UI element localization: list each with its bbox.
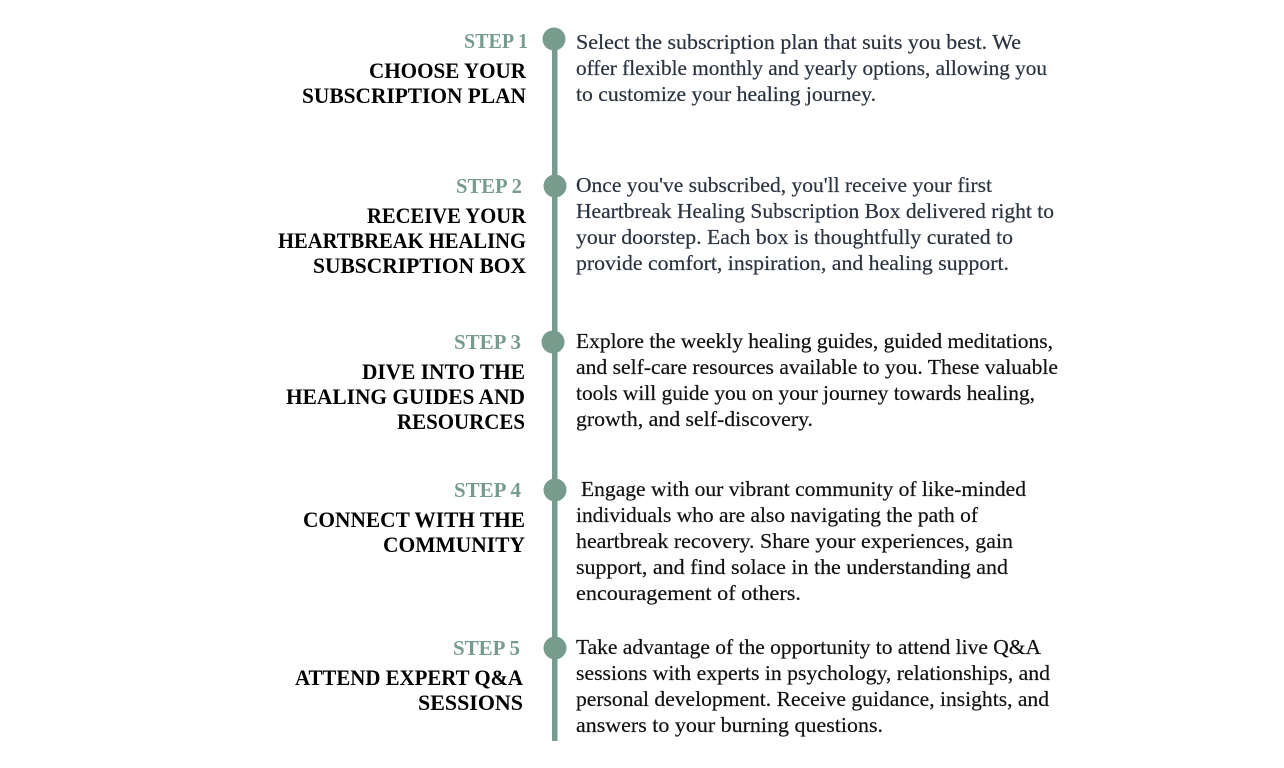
step 4 description: encouragement of others. bbox=[576, 581, 801, 605]
step 3 description: and self-care resources available to you. These valuable bbox=[576, 355, 1058, 379]
step 3 description: Explore the weekly healing guides, guided meditations, bbox=[576, 329, 1053, 353]
step 1 heading: CHOOSE YOUR bbox=[369, 58, 527, 83]
step 2 description: Once you've subscribed, you'll receive your first bbox=[576, 173, 992, 197]
step 3 description: growth, and self-discovery. bbox=[576, 407, 813, 431]
step 3 heading: STEP 3 bbox=[454, 330, 521, 354]
step 3 description bbox=[576, 329, 1058, 431]
step 1 description: to customize your healing journey. bbox=[576, 82, 876, 106]
step 2 description: your doorstep. Each box is thoughtfully curated to bbox=[576, 225, 1013, 249]
step 4 heading bbox=[303, 478, 525, 557]
step 3 heading: RESOURCES bbox=[397, 409, 525, 434]
step 5 description: sessions with experts in psychology, relationships, and bbox=[576, 661, 1051, 685]
step 1 heading: STEP 1 bbox=[464, 29, 528, 53]
step 5 description: Take advantage of the opportunity to attend live Q&A bbox=[576, 635, 1042, 659]
step 1 heading bbox=[302, 29, 528, 108]
step 3 heading: DIVE INTO THE bbox=[362, 359, 525, 384]
step 4 heading: CONNECT WITH THE bbox=[303, 507, 525, 532]
step 5 description: personal development. Receive guidance, insights, and bbox=[576, 687, 1050, 711]
step 5 description: answers to your burning questions. bbox=[576, 713, 883, 737]
step 1 description: Select the subscription plan that suits you best. We bbox=[576, 30, 1021, 54]
timeline: vertical line and step dots bbox=[542, 28, 566, 741]
step 1 description: offer flexible monthly and yearly options, allowing you bbox=[576, 56, 1048, 80]
step 2 description: provide comfort, inspiration, and healing support. bbox=[576, 251, 1009, 275]
step 2 description bbox=[576, 173, 1054, 275]
step 2 heading: SUBSCRIPTION BOX bbox=[313, 253, 526, 278]
step 2 heading: HEARTBREAK HEALING bbox=[278, 228, 526, 253]
step 4 description: support, and find solace in the understanding and bbox=[576, 555, 1009, 579]
step 2 heading: RECEIVE YOUR bbox=[367, 203, 527, 228]
step 4 heading: COMMUNITY bbox=[383, 532, 525, 557]
step 2 description: Heartbreak Healing Subscription Box delivered right to bbox=[576, 199, 1054, 223]
step 5 description bbox=[576, 635, 1051, 737]
step 5 heading: STEP 5 bbox=[453, 636, 520, 660]
step 2 heading bbox=[278, 174, 527, 278]
step 5 heading: ATTEND EXPERT Q&A bbox=[295, 665, 524, 690]
step 2 heading: STEP 2 bbox=[456, 174, 522, 198]
step 4 heading: STEP 4 bbox=[454, 478, 521, 502]
step 4 description: individuals who are also navigating the path of bbox=[576, 503, 978, 527]
step 1 heading: SUBSCRIPTION PLAN bbox=[302, 83, 526, 108]
step 4 description: Engage with our vibrant community of like-minded bbox=[581, 477, 1027, 501]
step 1 description bbox=[576, 30, 1048, 106]
step 4 description: heartbreak recovery. Share your experiences, gain bbox=[576, 529, 1014, 553]
step 5 heading bbox=[295, 636, 524, 715]
step 3 heading bbox=[286, 330, 525, 434]
step 3 heading: HEALING GUIDES AND bbox=[286, 384, 525, 409]
step 4 description bbox=[576, 477, 1027, 605]
step 3 description: tools will guide you on your journey towards healing, bbox=[576, 381, 1035, 405]
step 5 heading: SESSIONS bbox=[418, 690, 523, 715]
